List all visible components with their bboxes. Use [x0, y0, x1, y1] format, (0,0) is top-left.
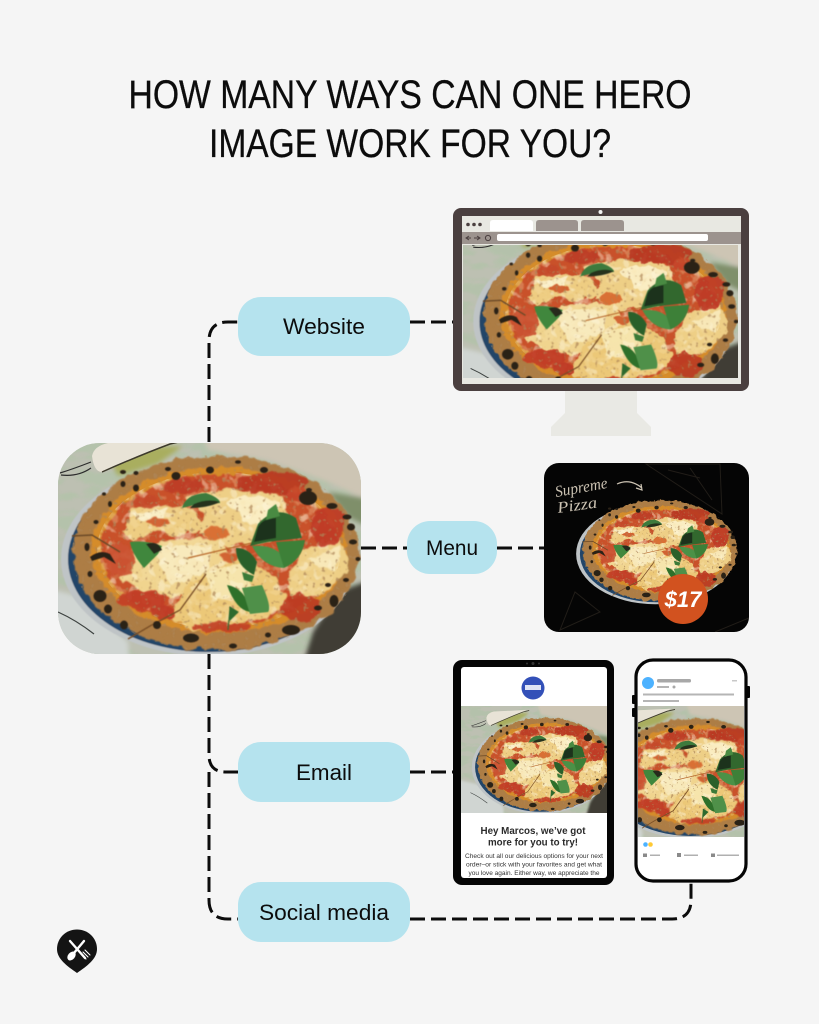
- email heading: Hey Marcos, we’ve got: [480, 825, 586, 837]
- price badge: $17: [664, 587, 703, 612]
- title: [128, 73, 692, 166]
- tablet with email: [453, 660, 614, 885]
- label: Menu: [407, 521, 497, 574]
- monitor frame: [453, 208, 749, 391]
- email body text: Check out all our delicious options for your next: [465, 853, 603, 860]
- arrow: [617, 482, 642, 490]
- cut-out pizza: [576, 498, 740, 604]
- tablet body: [453, 660, 614, 885]
- website hero image: [463, 245, 738, 378]
- brand logo: [522, 676, 544, 700]
- phone with social media post: [632, 658, 750, 883]
- email body text: [465, 853, 603, 877]
- brand logo: fork and spoon pin: [57, 930, 97, 973]
- monitor stand: [551, 391, 651, 436]
- email body text: you love again. Either way, we appreciate the: [468, 870, 600, 877]
- post image: [638, 706, 744, 837]
- browser window: [462, 216, 741, 384]
- post header: [642, 677, 737, 702]
- label: Website: [238, 297, 410, 356]
- email hero image: [461, 706, 607, 813]
- email screen: [461, 667, 607, 878]
- tablet camera: [526, 662, 540, 665]
- handwritten heading: Supreme: [554, 475, 609, 501]
- sketched pizza slices: [560, 464, 749, 632]
- email heading: more for you to try!: [488, 836, 578, 848]
- phone side buttons: [632, 686, 750, 717]
- label: Email: Email: [296, 760, 352, 785]
- handwritten heading: [554, 475, 609, 517]
- price badge: [658, 574, 708, 624]
- email heading: [480, 825, 586, 848]
- camera: [598, 210, 602, 214]
- phone body: [636, 660, 746, 881]
- title: IMAGE WORK FOR YOU?: [209, 122, 611, 166]
- label: Social media: Social media: [259, 900, 389, 925]
- label: Menu: Menu: [426, 537, 478, 560]
- email body text: order–or stick with your favorites and get what: [466, 862, 602, 868]
- handwritten heading: Pizza: [555, 495, 598, 517]
- label: Website: Website: [283, 314, 365, 339]
- title: HOW MANY WAYS CAN ONE HERO: [128, 73, 692, 117]
- dashed connector lines: [209, 322, 691, 919]
- post reactions: [643, 842, 739, 857]
- menu card: [544, 463, 749, 632]
- label: Email: [238, 742, 410, 802]
- hero pizza image: [58, 443, 361, 654]
- label: Social media: [238, 882, 410, 942]
- desktop monitor with website: [453, 208, 749, 436]
